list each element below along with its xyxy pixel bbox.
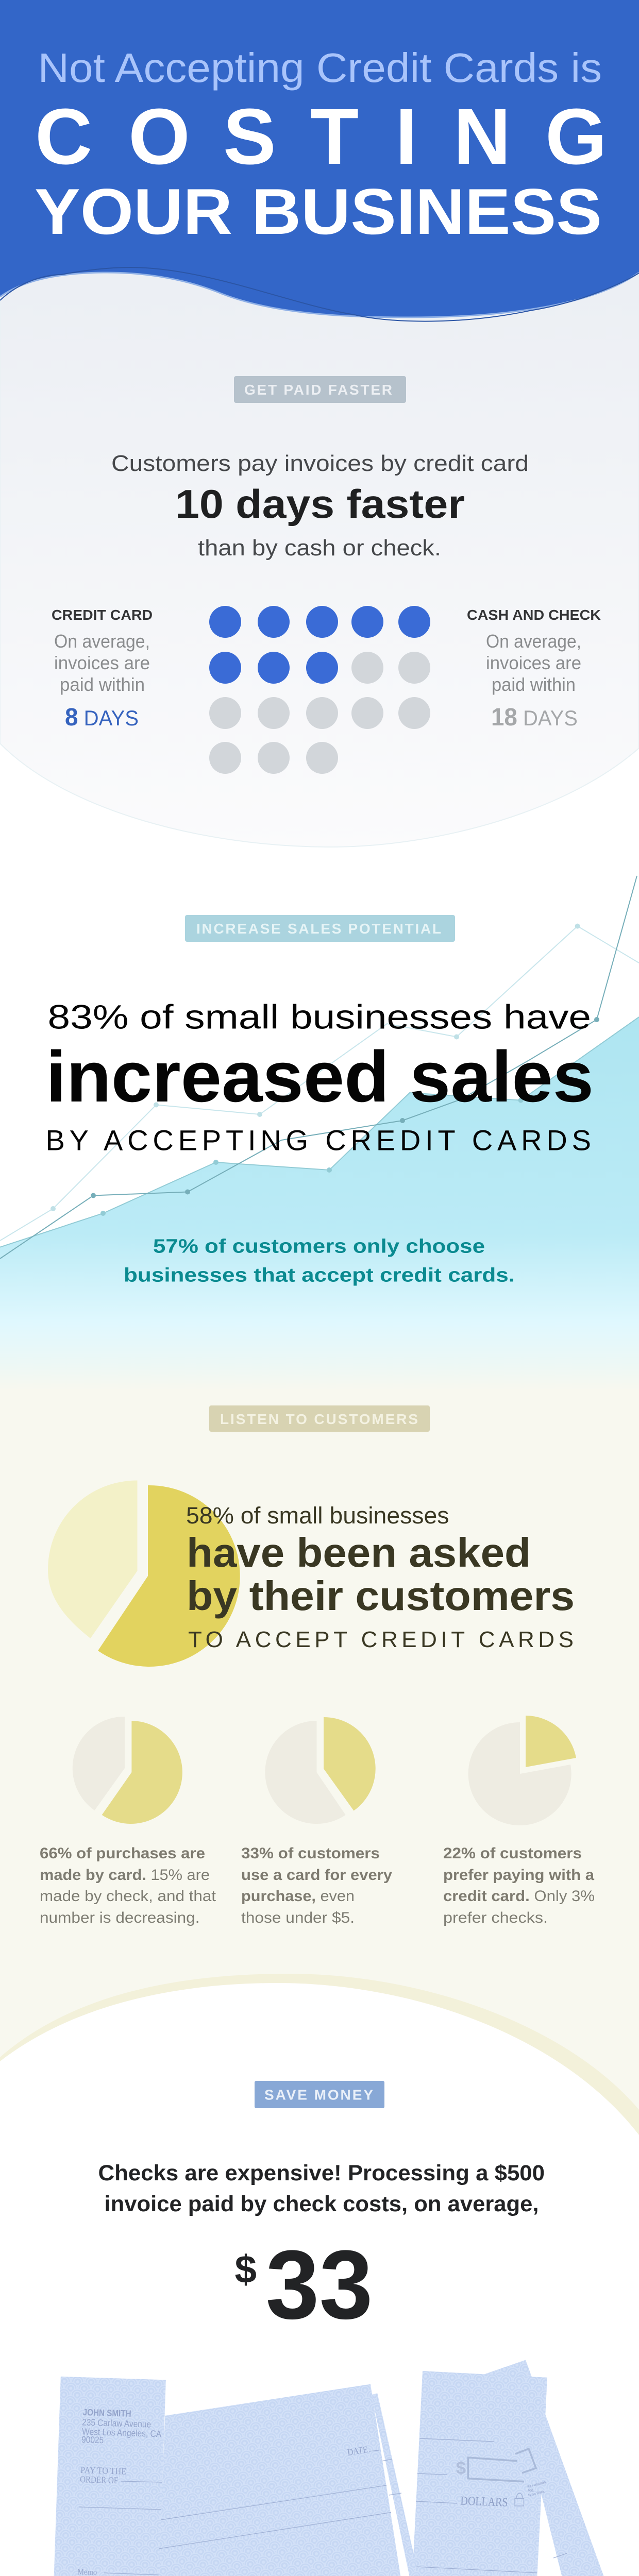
cash and check column xyxy=(467,607,601,731)
check piece 1: name and memo: JOHN SMITH xyxy=(82,2407,131,2419)
pie and caption: 33%: purchase, even xyxy=(241,1888,355,1905)
heading: increased sales: increased sales xyxy=(46,1036,594,1117)
tag: get paid faster: GET PAID FASTER xyxy=(244,382,392,398)
pie and caption: 22%: 22% of customers xyxy=(443,1845,582,1862)
heading: checks are expensive xyxy=(98,2161,545,2216)
heading: asked by customers: by their customers xyxy=(187,1573,575,1619)
tag: get paid faster xyxy=(234,376,406,403)
pie and caption: 22%: prefer checks. xyxy=(443,1909,548,1926)
check piece 2: check number xyxy=(156,2384,408,2576)
tag: save money xyxy=(255,2081,384,2108)
credit card column: CREDIT CARD xyxy=(52,607,153,623)
title line 1: Not Accepting Credit Cards is xyxy=(38,45,602,91)
heading: increased sales: 83% of small businesses have xyxy=(47,997,591,1036)
heading: customers pay faster: than by cash or check. xyxy=(198,535,441,561)
check piece 4: amount box: $ xyxy=(456,2459,466,2478)
credit card column xyxy=(52,607,153,731)
panel: save money xyxy=(0,1974,639,2576)
check piece 4: amount box: ls on Back xyxy=(528,2490,545,2498)
heading: customers pay faster xyxy=(111,451,529,561)
cash and check column: On average, xyxy=(486,631,581,652)
heading: increased sales: BY ACCEPTING CREDIT CARDS xyxy=(45,1124,591,1156)
panel: listen to customers xyxy=(0,1391,639,2164)
pie and caption: 66% xyxy=(40,1717,216,1926)
title line 2: COSTING xyxy=(35,92,607,181)
pie and caption: 66%: 66% of purchases are xyxy=(40,1845,205,1862)
pie and caption: 22%: prefer paying with a xyxy=(443,1867,594,1884)
heading: asked by customers xyxy=(186,1502,575,1652)
check piece 4: amount box xyxy=(411,2371,547,2576)
check piece 5: right strip xyxy=(485,2360,607,2576)
heading: asked by customers: TO ACCEPT CREDIT CARDS xyxy=(188,1627,574,1652)
pie and caption: 33%: use a card for every xyxy=(241,1867,392,1884)
heading: customers pay faster: 10 days faster xyxy=(175,481,465,527)
heading: customers pay faster: Customers pay invoices by credit card xyxy=(111,451,529,476)
pie and caption: 22% xyxy=(443,1716,595,1926)
tag: increase sales potential: INCREASE SALES POTENTIAL xyxy=(196,921,441,937)
credit card column: On average, xyxy=(54,631,150,652)
check piece 1: name and memo: 235 Carlaw Avenue xyxy=(82,2417,151,2430)
check piece 4: amount box: ity Features xyxy=(527,2481,546,2489)
callout: 57% of customers: businesses that accept credit cards. xyxy=(124,1264,515,1286)
header banner xyxy=(0,0,639,321)
panel: get paid faster xyxy=(0,258,639,847)
tag: listen to customers: LISTEN TO CUSTOMERS xyxy=(220,1411,418,1427)
check piece 4: amount box: ted. xyxy=(528,2489,534,2493)
check piece 1: name and memo: West Los Angeles, CA xyxy=(82,2427,161,2439)
check piece 1: name and memo: 90025 xyxy=(81,2434,104,2445)
callout: 57% of customers: 57% of customers only choose xyxy=(153,1235,485,1257)
credit card column: paid within xyxy=(60,674,145,695)
torn check illustration xyxy=(53,2360,607,2576)
pie and caption: 66%: made by check, and that xyxy=(40,1888,216,1905)
check piece 1: name and memo: PAY TO THE xyxy=(80,2465,126,2477)
pie and caption: 22%: credit card. Only 3% xyxy=(443,1888,595,1905)
check piece 4: amount box: DOLLARS xyxy=(460,2495,508,2510)
area chart with lines xyxy=(0,876,639,1392)
tag: save money: SAVE MONEY xyxy=(264,2087,373,2103)
pie and caption: 33%: those under $5. xyxy=(241,1909,355,1926)
pie and caption: 66%: made by card. 15% are xyxy=(40,1867,210,1884)
check piece 1: name and memo xyxy=(53,2377,169,2576)
check piece 1: name and memo: ORDER OF xyxy=(80,2474,118,2485)
title line 3: YOUR BUSINESS xyxy=(35,175,602,248)
check piece 2: check number: DATE xyxy=(346,2444,368,2458)
cash and check column: invoices are xyxy=(486,652,581,673)
cash and check column: 18 DAYS xyxy=(491,704,578,731)
heading: checks are expensive: invoice paid by check costs, on average, xyxy=(104,2192,539,2216)
pie and caption: 33%: 33% of customers xyxy=(241,1845,380,1862)
pie and caption: 66%: number is decreasing. xyxy=(40,1909,200,1926)
credit card column: 8 DAYS xyxy=(65,704,139,731)
big number: $33: $ xyxy=(235,2248,257,2292)
heading: asked by customers: 58% of small businesses xyxy=(186,1502,449,1529)
pie and caption: 33% xyxy=(241,1717,392,1926)
big number: $33: 33 xyxy=(266,2230,373,2340)
cash and check column: CASH AND CHECK xyxy=(467,607,601,623)
callout: 57% of customers xyxy=(124,1235,515,1286)
pie chart: 58% xyxy=(48,1481,240,1667)
credit card column: invoices are xyxy=(54,652,150,673)
tag: increase sales potential xyxy=(185,915,455,942)
cash and check column: paid within xyxy=(492,674,576,695)
dot chart: days to payment xyxy=(209,606,430,774)
tag: listen to customers xyxy=(209,1405,430,1432)
heading: checks are expensive: Checks are expensive! Processing a $500 xyxy=(98,2161,545,2185)
heading: asked by customers: have been asked xyxy=(187,1530,531,1575)
check piece 3: narrow strip xyxy=(372,2393,430,2576)
panel: increase sales potential xyxy=(0,876,639,1392)
heading: increased sales xyxy=(45,997,594,1156)
